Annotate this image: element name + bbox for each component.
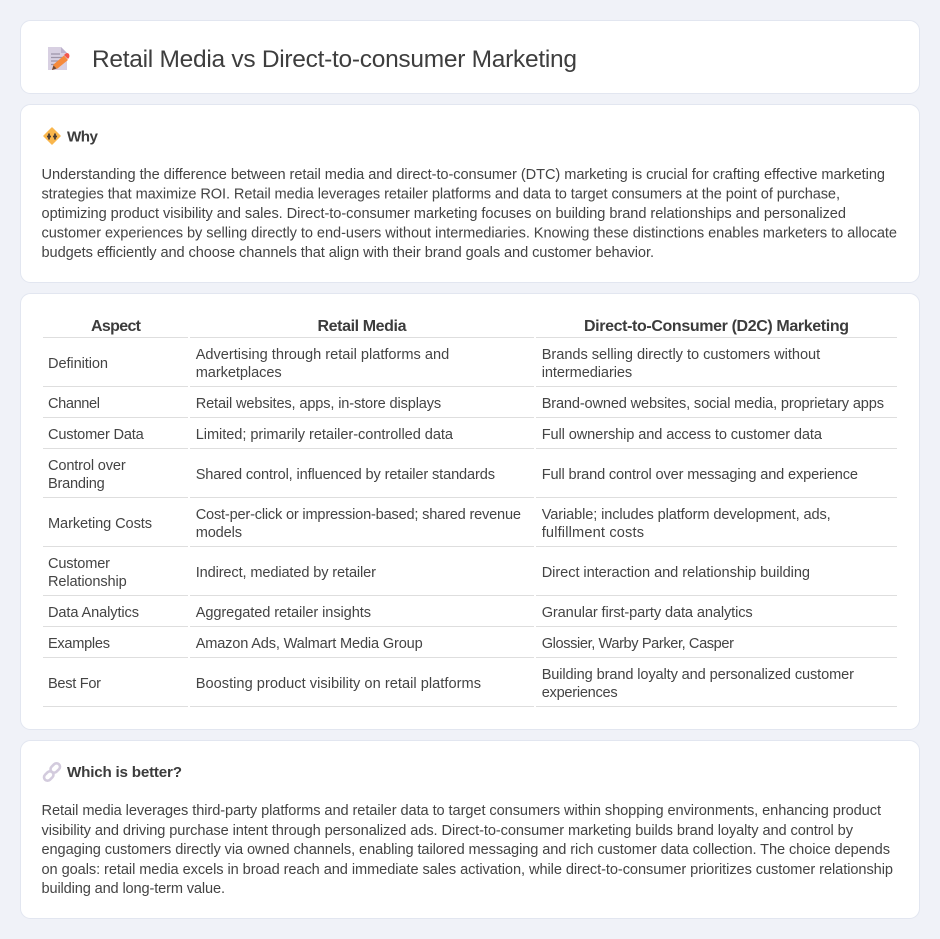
row: examples: Glossier, Warby Parker, Casper — [542, 636, 734, 652]
row: marketing costs: Marketing Costs — [48, 516, 152, 532]
icon: diamond warning sign — [44, 128, 60, 144]
text block: which is better body: on goals: retail media excels in broad reach and immediate sales activation, while direct-to-consumer prioritizes customer relationship — [42, 862, 893, 878]
text block: which is better body: engaging customers directly via owned channels, enabling tailored messaging and rich customer data collection. The choice depends — [42, 842, 890, 858]
row: best for: Building brand loyalty and personalized customer — [542, 667, 854, 683]
row: best for: experiences — [542, 685, 618, 701]
row: control over branding: Branding — [48, 476, 105, 492]
panel: which is better — [20, 740, 920, 918]
row: channel: Channel — [48, 396, 100, 412]
text block: why body: Understanding the difference between retail media and direct-to-consumer (DTC) marketing is crucial for crafting effective marketing — [42, 167, 885, 183]
row: examples — [43, 636, 897, 658]
row: definition — [43, 347, 897, 386]
row: customer relationship — [43, 556, 897, 596]
text block: why body: strategies that maximize ROI. Retail media leverages retailer platforms and data to target consumers at the point of purchase, — [42, 186, 840, 202]
row: best for: Best For — [48, 676, 101, 692]
panel: why — [20, 104, 920, 282]
row: examples: Examples — [48, 636, 110, 652]
text block: why body: customer experiences by selling directly to end-users without intermediaries. Knowing these distinctions enables marketers to allocate — [42, 226, 897, 242]
row: marketing costs: fulfillment costs — [542, 525, 644, 541]
row: marketing costs: Variable; includes platform development, ads, — [542, 507, 831, 523]
row: customer data: Customer Data — [48, 427, 145, 443]
panel: comparison table — [20, 294, 920, 730]
row: customer data: Limited; primarily retailer-controlled data — [196, 427, 454, 443]
row: control over branding: Control over — [48, 458, 126, 474]
row: control over branding: Full brand control over messaging and experience — [542, 467, 858, 483]
text block: why body: optimizing product visibility and sales. Direct-to-consumer marketing focuses on building brand relationships and personalized — [42, 206, 846, 222]
text block: which is better body — [42, 803, 893, 897]
row: control over branding — [43, 458, 897, 498]
heading: why: Why — [67, 128, 99, 146]
text block: why body — [42, 167, 897, 261]
row: best for: Boosting product visibility on retail platforms — [196, 676, 481, 692]
table header row: Direct-to-Consumer (D2C) Marketing — [584, 318, 849, 335]
table header row: Aspect — [91, 318, 142, 335]
row: customer relationship: Indirect, mediated by retailer — [196, 565, 376, 581]
row: definition: Advertising through retail platforms and — [196, 347, 449, 363]
row: data analytics: Aggregated retailer insights — [196, 605, 371, 621]
icon: memo with pencil — [48, 47, 70, 70]
row: definition: Definition — [48, 356, 108, 372]
panel: header — [20, 20, 920, 94]
row: channel: Brand-owned websites, social media, proprietary apps — [542, 396, 884, 412]
row: data analytics: Granular first-party data analytics — [542, 605, 753, 621]
text block: which is better body: visibility and driving purchase intent through personalized ads. Direct-to-consumer marketing builds brand loyalty and control by — [42, 823, 854, 839]
row: examples: Amazon Ads, Walmart Media Group — [196, 636, 423, 652]
icon: link — [43, 762, 61, 782]
row: definition: marketplaces — [196, 365, 282, 381]
row: channel: Retail websites, apps, in-store displays — [196, 396, 441, 412]
text block: which is better body: building and long-term value. — [42, 881, 225, 897]
table header row — [43, 318, 897, 338]
row: customer data — [43, 427, 897, 448]
row: customer relationship: Customer — [48, 556, 110, 572]
row: customer relationship: Relationship — [48, 574, 127, 590]
row: marketing costs: models — [196, 525, 242, 541]
row: marketing costs: Cost-per-click or impression-based; shared revenue — [196, 507, 521, 523]
row: customer relationship: Direct interaction and relationship building — [542, 565, 810, 581]
text block: why body: budgets efficiently and choose channels that align with their brand goals and customer behavior. — [42, 245, 654, 261]
table header row: Retail Media — [318, 318, 407, 335]
row: control over branding: Shared control, influenced by retailer standards — [196, 467, 495, 483]
row: marketing costs — [43, 507, 897, 546]
row: best for — [43, 667, 897, 706]
title: Retail Media vs Direct-to-consumer Marketing — [92, 46, 577, 73]
row: customer data: Full ownership and access to customer data — [542, 427, 823, 443]
row: data analytics — [43, 605, 897, 626]
row: definition: intermediaries — [542, 365, 632, 381]
row: data analytics: Data Analytics — [48, 605, 139, 621]
row: channel — [43, 396, 897, 418]
row: definition: Brands selling directly to customers without — [542, 347, 820, 363]
heading: which is better: Which is better? — [67, 764, 182, 781]
text block: which is better body: Retail media leverages third-party platforms and retailer data to target consumers within shopping environments, enhancing product — [42, 803, 881, 819]
